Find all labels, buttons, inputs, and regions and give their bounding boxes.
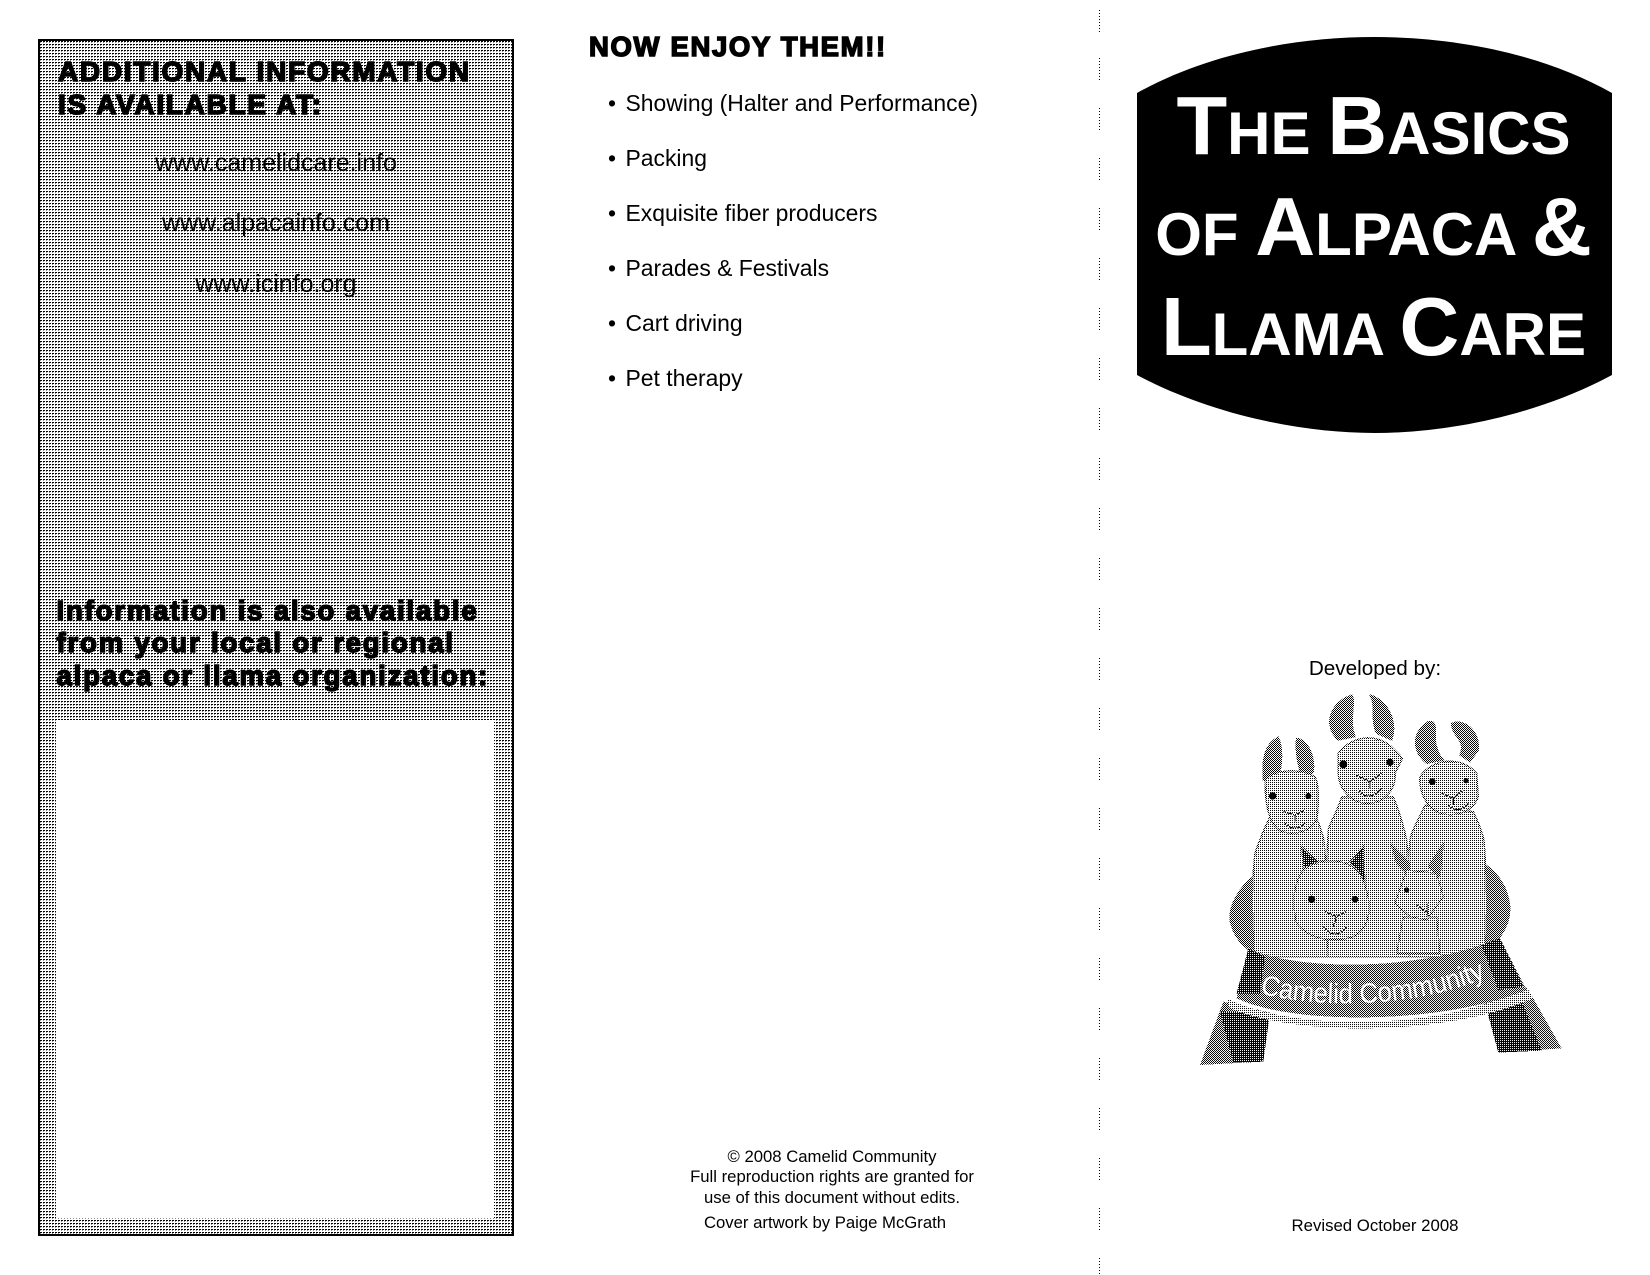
title line 3: LLAMA CARE bbox=[1161, 280, 1586, 373]
link 1: www.camelidcare.info bbox=[155, 149, 397, 177]
title line 2: OF ALPACA & bbox=[1155, 180, 1592, 273]
title banner bbox=[1137, 37, 1612, 433]
left llama bbox=[1252, 737, 1328, 957]
item: • Pet therapy bbox=[608, 365, 743, 391]
camelid community logo: Camelid Community bbox=[1262, 964, 1482, 1004]
front alpaca bbox=[1294, 847, 1369, 940]
copyright notice: Cover artwork by Paige McGrath bbox=[704, 1213, 946, 1232]
heading: additional information: ADDITIONAL INFORMATION bbox=[58, 56, 471, 87]
item: • Cart driving bbox=[608, 310, 743, 336]
center llama bbox=[1326, 695, 1411, 957]
ribbon tails bbox=[1200, 987, 1562, 1065]
heading: local organizations: from your local or regional bbox=[56, 627, 455, 658]
ribbon text bbox=[1260, 977, 1488, 1003]
link 2: www.alpacainfo.com bbox=[162, 209, 390, 237]
revised date: Revised October 2008 bbox=[1292, 1216, 1458, 1235]
title line 1: THE BASICS bbox=[1176, 79, 1571, 172]
item: • Exquisite fiber producers bbox=[608, 200, 877, 226]
link 3: www.icinfo.org bbox=[195, 270, 357, 298]
item: • Parades & Festivals bbox=[608, 255, 829, 281]
baby llama bbox=[1392, 843, 1443, 953]
camelid community logo bbox=[1200, 694, 1562, 1065]
developed by label: Developed by: bbox=[1309, 657, 1441, 680]
back arms bbox=[1229, 862, 1510, 957]
activity list bbox=[608, 90, 978, 391]
copyright notice bbox=[690, 1146, 974, 1232]
website links bbox=[155, 149, 397, 298]
ribbon band bbox=[1227, 938, 1533, 1028]
heading: local organizations: alpaca or llama organization: bbox=[56, 660, 489, 690]
heading: additional information bbox=[58, 56, 471, 120]
panel: additional information bbox=[38, 39, 514, 1236]
item: • Showing (Halter and Performance) bbox=[608, 90, 978, 116]
blank white box bbox=[56, 720, 494, 1218]
copyright notice: Full reproduction rights are granted for bbox=[690, 1167, 974, 1186]
heading: local organizations: Information is also available bbox=[56, 594, 478, 626]
item: • Packing bbox=[608, 145, 707, 171]
heading: local organizations bbox=[56, 594, 489, 692]
heading: now enjoy them: NOW ENJOY THEM!! bbox=[589, 31, 887, 62]
copyright notice: © 2008 Camelid Community bbox=[728, 1146, 936, 1166]
right llama bbox=[1403, 722, 1486, 957]
heading: additional information: IS AVAILABLE AT: bbox=[58, 89, 323, 120]
black banner shape bbox=[1137, 37, 1612, 433]
copyright notice: use of this document without edits. bbox=[704, 1188, 960, 1206]
